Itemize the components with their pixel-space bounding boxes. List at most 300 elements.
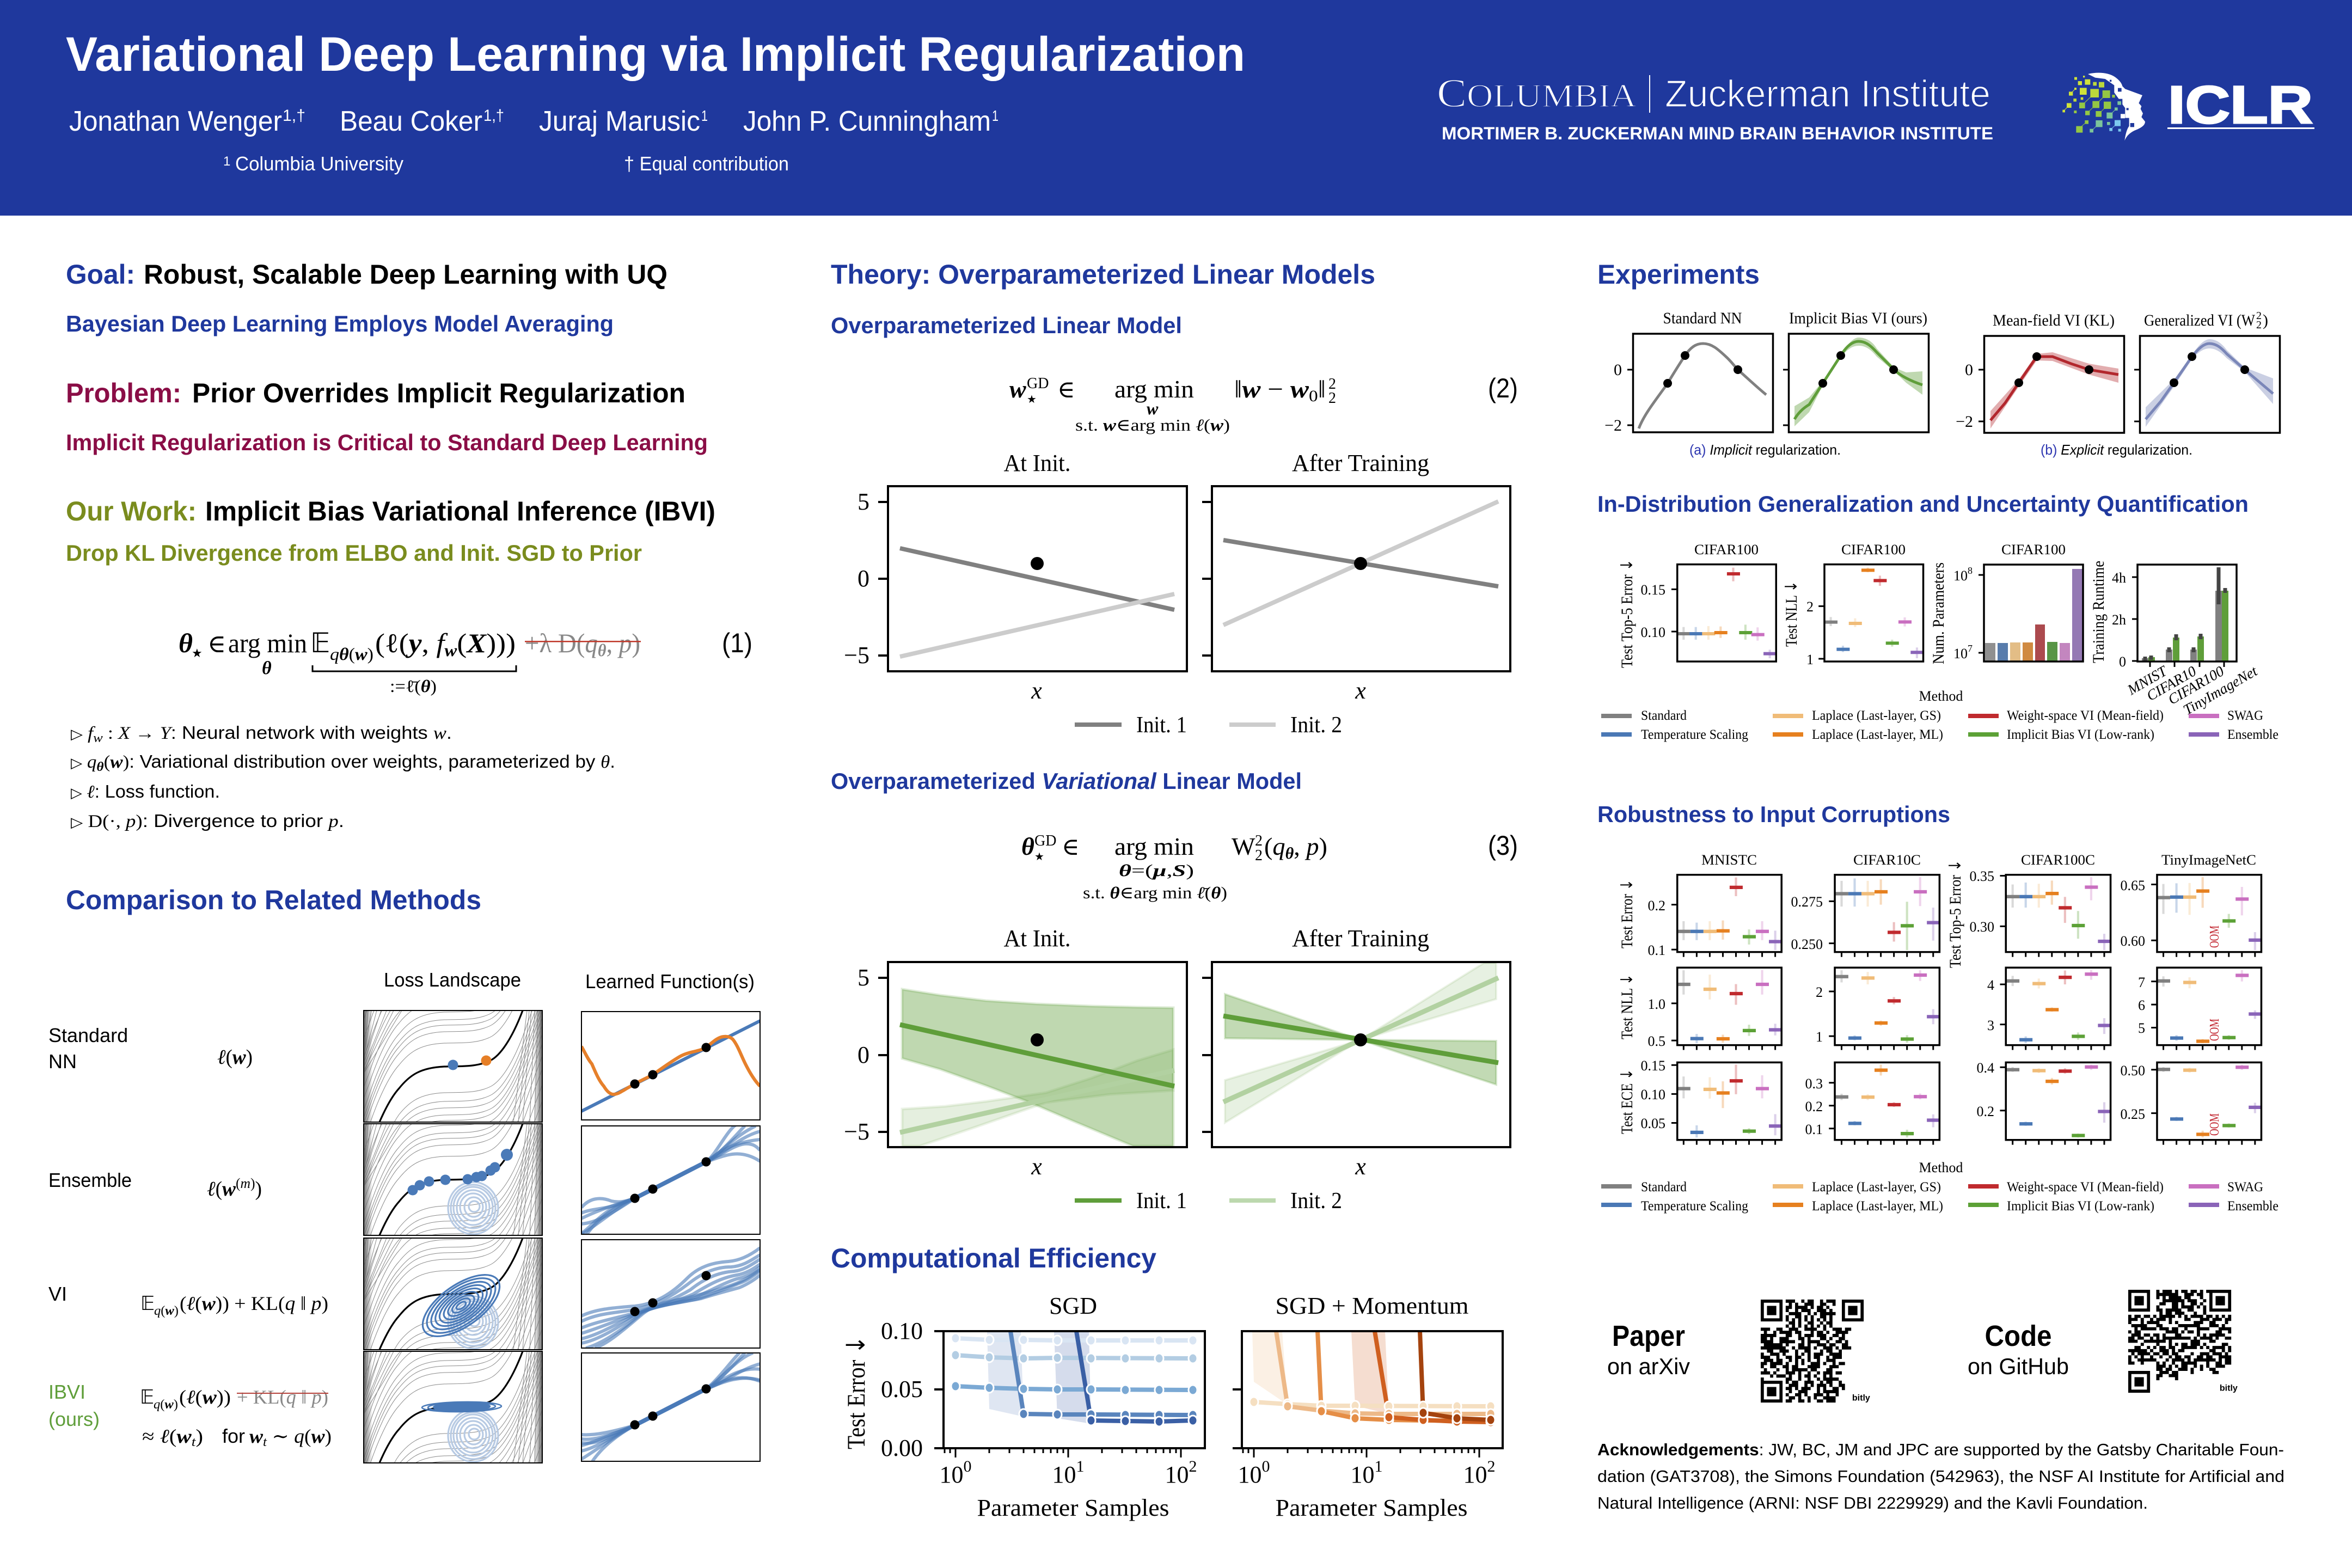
logo: ICLR <box>2062 73 2314 140</box>
chart: mean-field VI: 0 <box>1965 361 1973 379</box>
row label: IBVI: for <box>222 1425 245 1447</box>
loss landscape: VI <box>363 1238 543 1350</box>
equation 3: θ <box>1285 844 1294 862</box>
chart: TinyImageNetC ECE: 0.50 <box>2120 1063 2145 1079</box>
equation 3: p) <box>1306 832 1327 860</box>
panel: our work: Implicit Bias Variational Inference (IBVI) <box>205 496 715 526</box>
chart: TinyImageNetC NLL <box>2138 967 2261 1050</box>
authors: Beau Coker <box>340 106 482 137</box>
chart: linear model, at init <box>844 450 1187 704</box>
code link: on GitHub <box>1968 1353 2069 1379</box>
row label: VI: 𝔼 <box>140 1293 155 1315</box>
chart: CIFAR100 parameters <box>1930 542 2083 664</box>
chart: CIFAR100C ECE <box>1976 1060 2111 1145</box>
chart: CIFAR100 NLL: 1 <box>1806 652 1814 667</box>
paper link: Paper <box>1612 1320 1685 1352</box>
chart: SGD + momentum: 10 <box>1463 1461 1487 1488</box>
legend: in-distribution: Temperature Scaling <box>1641 727 1748 742</box>
chart: CIFAR100 parameters: CIFAR100 <box>2001 542 2066 558</box>
row label: IBVI: q(w) <box>294 1425 331 1447</box>
chart: MNISTC error <box>1647 875 1781 958</box>
panel: problem: Prior Overrides Implicit Regularization <box>192 378 685 408</box>
chart: variational, at init: At Init. <box>1004 925 1070 952</box>
chart: training runtime: CIFAR10 <box>2143 663 2199 704</box>
column headings <box>384 969 755 993</box>
equation 3: (q <box>1264 832 1285 860</box>
chart: variational, at init: 0 <box>857 1042 869 1068</box>
paper link: on arXiv <box>1607 1353 1690 1379</box>
panel: goal: Robust, Scalable Deep Learning with UQ <box>144 259 667 290</box>
chart: SGD: 0.10 <box>881 1318 923 1344</box>
learned function: ensemble <box>581 1123 760 1234</box>
QR code: paper: bitly <box>1852 1393 1870 1403</box>
chart: standard NN: Standard NN <box>1663 309 1742 327</box>
logo: Columbia Zuckerman Institute: COLUMBIA <box>1437 71 1637 116</box>
legend: in-distribution: Laplace (Last-layer, ML) <box>1812 727 1943 742</box>
chart: TinyImageNetC error <box>2120 875 2261 957</box>
column titles: CIFAR10C <box>1853 852 1921 868</box>
chart: CIFAR100C error: 0.35 <box>1970 868 1994 884</box>
chart: variational, at init: −5 <box>844 1118 869 1145</box>
chart: training runtime: TinyImageNet <box>2180 662 2261 718</box>
text block: symbol definitions <box>71 722 615 831</box>
legend: linear model: Init. 1 <box>1136 713 1187 738</box>
chart: TinyImageNetC NLL: 6 <box>2138 997 2145 1013</box>
chart: CIFAR100 parameters: 7 <box>1968 643 1973 654</box>
equation 1: :=ℓ̄(θ) <box>390 676 437 696</box>
chart: training runtime: Training Runtime <box>2090 561 2108 663</box>
chart: MNISTC ECE: 0.05 <box>1641 1116 1665 1131</box>
authors: 1,† <box>283 107 305 125</box>
column headings: Learned Function(s) <box>585 970 755 993</box>
row label: ensemble: (m) <box>236 1175 255 1191</box>
text block: symbol definitions: ( <box>104 752 110 772</box>
chart: generalized VI <box>2134 310 2280 433</box>
authors: John P. Cunningham <box>743 106 991 137</box>
chart: MNISTC NLL: 0.5 <box>1647 1033 1665 1049</box>
chart: CIFAR10C NLL: 2 <box>1816 984 1823 1000</box>
chart: SGD: 0.05 <box>881 1376 923 1402</box>
text block: symbol definitions: ▷ ℓ: Loss function. <box>71 781 220 802</box>
column titles: TinyImageNetC <box>2161 852 2256 868</box>
row label: standard NN: Standard <box>48 1024 128 1046</box>
row label: IBVI: (ℓ(w)) <box>179 1386 231 1408</box>
chart: linear model, at init: At Init. <box>1004 450 1070 476</box>
chart: CIFAR100 NLL <box>1782 542 1924 667</box>
affiliations: Columbia University <box>235 152 403 175</box>
title: Variational Deep Learning via Implicit Regularization <box>66 27 1245 81</box>
chart: SGD: 1 <box>1076 1457 1085 1475</box>
equation 1: ∈ <box>207 630 226 658</box>
row label: IBVI: t <box>192 1435 197 1449</box>
chart: linear model, after training <box>1202 450 1510 704</box>
heading: computational efficiency: Computational Efficiency <box>831 1243 1156 1273</box>
logo: Columbia Zuckerman Institute: MORTIMER B. ZUCKERMAN MIND BRAIN BEHAVIOR INSTITUTE <box>1442 124 1993 143</box>
chart: TinyImageNetC ECE: 0.25 <box>2120 1106 2145 1122</box>
chart: MNISTC ECE <box>1641 1058 1781 1145</box>
chart: mean-field VI: Mean-field VI (KL) <box>1993 311 2115 329</box>
text block: symbol definitions: X → Y: Neural network with weights w. <box>118 722 451 743</box>
legend: in-distribution: Ensemble <box>2227 727 2278 742</box>
chart: variational, after training: After Training <box>1292 925 1429 952</box>
legend: in-distribution: SWAG <box>2227 708 2263 723</box>
chart: MNISTC NLL: 1.0 <box>1647 996 1665 1012</box>
row axis labels: Test Error ↓ <box>1618 879 1637 948</box>
legend: robustness: Weight-space VI (Mean-field) <box>2007 1180 2164 1195</box>
comparison figure <box>48 972 761 1463</box>
row axis labels: Test NLL ↓ <box>1618 974 1637 1039</box>
equation 3: , <box>1294 832 1306 860</box>
authors: Jonathan Wenger <box>69 106 282 137</box>
row label: IBVI <box>48 1381 332 1449</box>
authors: Juraj Marusic <box>539 106 700 137</box>
chart: generalized VI: ) <box>2263 311 2268 329</box>
row label: IBVI: ∼ <box>267 1425 294 1447</box>
panel: problem: Problem: <box>66 378 181 408</box>
equation 3: θ <box>1021 832 1034 860</box>
authors: 1 <box>701 107 708 124</box>
equation 2: w <box>1147 399 1159 418</box>
chart: CIFAR100C error: 0.30 <box>1970 919 1994 935</box>
equation 2: arg min <box>1114 375 1194 403</box>
equation 2: GD <box>1027 375 1049 392</box>
affiliations: 1 <box>223 154 230 169</box>
legend: in-distribution: Weight-space VI (Mean-field) <box>2007 708 2164 723</box>
chart: linear model, at init: −5 <box>844 642 869 669</box>
equation 2: ‖w − w <box>1234 375 1307 403</box>
column titles: CIFAR100C <box>2021 852 2095 868</box>
equation 1: θ <box>262 658 272 678</box>
legend: in-distribution: Implicit Bias VI (Low-rank) <box>2007 727 2154 742</box>
learned function: standard NN <box>581 1012 760 1120</box>
text block: symbol definitions: θ <box>96 760 104 774</box>
chart: CIFAR100 parameters: 8 <box>1968 565 1973 576</box>
chart: CIFAR100 NLL: Test NLL ↓ <box>1782 581 1801 647</box>
legend: robustness: Ensemble <box>2227 1199 2278 1214</box>
learned function: VI <box>581 1240 760 1348</box>
heading: theory: Theory: Overparameterized Linear Models <box>831 259 1375 290</box>
panel: goal: Bayesian Deep Learning Employs Model Averaging <box>66 311 614 336</box>
logo: ICLR: ICLR <box>2168 75 2313 134</box>
chart: training runtime: 4h <box>2112 570 2126 586</box>
chart: SGD + momentum: 0 <box>1262 1457 1270 1475</box>
chart: CIFAR100C error <box>1970 868 2111 957</box>
equation 1: , <box>606 628 619 658</box>
column titles <box>1701 852 2256 868</box>
affiliations: † Equal contribution <box>624 152 789 175</box>
header band <box>0 0 2352 216</box>
chart: TinyImageNetC ECE: OOM <box>2208 1113 2222 1136</box>
equation 1: +λ D(q <box>525 628 598 658</box>
text block: symbol definitions: ▷ f <box>71 724 93 743</box>
row label: VI <box>48 1283 328 1318</box>
chart: CIFAR100 parameters: 10 <box>1953 646 1968 661</box>
chart: MNISTC error: 0.1 <box>1647 942 1665 958</box>
text block: symbol definitions: w <box>93 731 103 745</box>
chart: TinyImageNetC NLL: 5 <box>2138 1020 2145 1036</box>
chart: CIFAR10C error: 0.250 <box>1791 936 1823 952</box>
captions: (b) Explicit regularization. <box>2041 442 2192 458</box>
chart: SGD: Test Error ↓ <box>841 1336 871 1449</box>
QR code: code <box>2128 1290 2238 1393</box>
chart: SGD: 2 <box>1189 1457 1197 1475</box>
chart: generalized VI: 2 <box>2256 310 2262 322</box>
chart: generalized VI: Generalized VI (W <box>2144 311 2256 329</box>
chart: SGD + momentum: SGD + Momentum <box>1275 1293 1469 1319</box>
chart: mean-field VI: −2 <box>1956 413 1973 431</box>
equation 2: ★ <box>1027 393 1037 406</box>
chart: CIFAR100C NLL: 3 <box>1987 1018 1994 1033</box>
legend: in-distribution <box>1601 688 2278 742</box>
chart: CIFAR100 top-5 error <box>1618 542 1776 668</box>
equation 2: ‖ <box>1318 375 1326 403</box>
row axis labels: Test Top-5 Error ↓ <box>1946 860 1965 968</box>
equation 2: 0 <box>1309 387 1318 405</box>
chart: TinyImageNetC NLL: OOM <box>2208 1019 2222 1041</box>
chart: training runtime: MNIST <box>2124 662 2171 699</box>
chart: SGD + momentum: 1 <box>1374 1457 1383 1475</box>
equation 3: W <box>1232 832 1255 860</box>
panel: goal: Goal: <box>66 259 135 290</box>
chart: SGD: 0.00 <box>881 1435 923 1461</box>
text block: symbol definitions: : <box>103 724 118 743</box>
chart: CIFAR100 top-5 error: Test Top-5 Error ↓ <box>1618 559 1637 668</box>
code link: Code <box>1985 1320 2051 1352</box>
chart: SGD + momentum: 10 <box>1238 1461 1262 1488</box>
equation 2: w <box>1009 375 1026 403</box>
chart: CIFAR10C ECE: 0.2 <box>1805 1099 1823 1114</box>
panel: our work: Drop KL Divergence from ELBO and Init. SGD to Prior <box>66 540 642 566</box>
legend: variational <box>1075 1189 1342 1214</box>
chart: MNISTC ECE: 0.15 <box>1641 1058 1665 1074</box>
heading: in-distribution: In-Distribution Generalization and Uncertainty Quantification <box>1597 491 2249 517</box>
equation 2: 2 <box>1328 390 1336 407</box>
equation 1: 𝔼 <box>310 627 330 659</box>
chart: CIFAR100 top-5 error: CIFAR100 <box>1694 542 1759 558</box>
chart: variational, at init <box>844 925 1187 1180</box>
equation 2: 2 <box>1328 376 1336 393</box>
chart: CIFAR100C NLL <box>1987 967 2111 1050</box>
logo: Columbia Zuckerman Institute <box>1437 71 1993 143</box>
chart: CIFAR100 top-5 error: 0.10 <box>1641 624 1665 640</box>
chart: TinyImageNetC NLL: 7 <box>2138 975 2145 990</box>
acknowledgements: Natural Intelligence (ARNI: NSF DBI 2229929) and the Kavli Foundation. <box>1597 1493 2148 1512</box>
equation 3: 2 <box>1255 847 1263 864</box>
chart: TinyImageNetC error: 0.65 <box>2120 878 2145 893</box>
text block: symbol definitions: ▷ q <box>71 752 96 772</box>
chart: CIFAR100 NLL: 2 <box>1806 599 1814 615</box>
row label: ensemble <box>48 1169 262 1200</box>
legend: robustness: Temperature Scaling <box>1641 1199 1748 1214</box>
legend: robustness: Method <box>1919 1160 1963 1175</box>
loss landscape: standard NN <box>363 1010 543 1123</box>
row label: IBVI: ) <box>195 1425 203 1447</box>
logo: Columbia Zuckerman Institute: Zuckerman Institute <box>1665 72 1990 115</box>
chart: SGD + momentum: 2 <box>1487 1457 1495 1475</box>
captions <box>1689 442 2192 458</box>
row label: standard NN: ℓ(w) <box>217 1046 253 1069</box>
chart: training runtime <box>2090 561 2261 718</box>
chart: training runtime: CIFAR100 <box>2165 663 2227 708</box>
chart: mean-field VI <box>1956 311 2124 433</box>
row label: IBVI: 𝔼 <box>140 1386 154 1408</box>
chart: CIFAR10C ECE: 0.1 <box>1805 1122 1823 1137</box>
row label: ensemble: ) <box>255 1178 262 1200</box>
equation 1 <box>179 627 752 696</box>
chart: CIFAR100C ECE: 0.4 <box>1976 1060 1994 1076</box>
chart: TinyImageNetC ECE <box>2120 1062 2261 1145</box>
legend: in-distribution: Laplace (Last-layer, GS) <box>1812 708 1941 723</box>
chart: linear model, at init: 5 <box>857 488 869 515</box>
equation 2: ∈ <box>1057 376 1075 403</box>
chart: linear model, at init: 0 <box>857 565 869 592</box>
chart: linear model, after training: After Training <box>1292 450 1429 476</box>
equation 3: (3) <box>1488 830 1518 861</box>
chart: TinyImageNetC error: 0.60 <box>2120 933 2145 949</box>
chart: implicit bias VI <box>1783 309 1928 432</box>
row label: standard NN: NN <box>48 1050 77 1073</box>
chart: generalized VI: 2 <box>2256 319 2262 331</box>
acknowledgements <box>1597 1440 2284 1512</box>
chart: SGD: 0 <box>964 1457 971 1475</box>
row label: IBVI: w <box>249 1425 264 1447</box>
row label: IBVI: + KL(q ‖ p) <box>237 1386 328 1408</box>
chart: SGD + momentum: 10 <box>1350 1461 1374 1488</box>
panel: goal <box>66 259 667 336</box>
row label: VI: (ℓ(w)) + KL(q ‖ p) <box>180 1293 328 1314</box>
legend: in-distribution: Standard <box>1641 708 1687 723</box>
chart: CIFAR100 parameters: 10 <box>1953 568 1968 584</box>
equation 3: ∈ <box>1062 834 1080 860</box>
acknowledgements: Acknowledgements: JW, BC, JM and JPC are supported by the Gatsby Charitable Foun- <box>1597 1440 2284 1459</box>
equation 1: p) <box>619 628 641 658</box>
chart: CIFAR10C error <box>1791 875 1939 957</box>
equation 3: s.t. θ∈arg min ℓ̄(θ) <box>1083 883 1227 902</box>
legend: robustness: Laplace (Last-layer, GS) <box>1812 1180 1941 1195</box>
equation 1: (ℓ(y, f <box>375 628 444 658</box>
chart: standard NN: −2 <box>1604 416 1622 434</box>
heading: robustness: Robustness to Input Corruptions <box>1597 801 1950 827</box>
chart: standard NN: 0 <box>1614 361 1622 379</box>
chart: CIFAR10C error: 0.275 <box>1791 894 1823 910</box>
chart: SGD: Parameter Samples <box>977 1494 1169 1521</box>
equation 1: ★ <box>192 647 203 660</box>
row label: IBVI: t <box>263 1435 267 1449</box>
legend: robustness: Implicit Bias VI (Low-rank) <box>2007 1199 2154 1214</box>
chart: CIFAR100C NLL: 4 <box>1987 977 1994 993</box>
affiliations <box>223 152 789 175</box>
panel: our work: Our Work: <box>66 496 197 526</box>
legend: robustness: SWAG <box>2227 1180 2263 1195</box>
authors: 1,† <box>483 107 504 125</box>
equation 3: GD <box>1034 832 1056 849</box>
loss landscape: IBVI <box>363 1351 543 1463</box>
row label: IBVI: q(w) <box>154 1398 178 1412</box>
column titles: MNISTC <box>1701 852 1757 868</box>
chart: implicit bias VI: Implicit Bias VI (ours) <box>1789 309 1927 327</box>
equation 1: θ <box>179 628 193 658</box>
acknowledgements: dation (GAT3708), the Simons Foundation (542963), the NSF AI Institute for Artificial and <box>1597 1467 2284 1486</box>
equation 1: X))) <box>467 628 513 658</box>
chart: CIFAR10C ECE <box>1805 1062 1939 1145</box>
row label: IBVI: (ours) <box>48 1408 100 1430</box>
equation 1: ( <box>457 628 467 658</box>
chart: training runtime: 0 <box>2119 654 2126 670</box>
legend: in-distribution: Method <box>1919 688 1963 704</box>
chart: CIFAR10C ECE: 0.3 <box>1805 1076 1823 1092</box>
chart: training runtime: 2h <box>2112 612 2126 628</box>
chart: linear model, at init: x <box>1031 677 1042 704</box>
equation 1: w <box>444 640 457 660</box>
equation 3: arg min <box>1114 832 1194 860</box>
heading: comparison: Comparison to Related Methods <box>66 885 481 915</box>
learned function: IBVI <box>581 1353 760 1461</box>
panel: problem <box>66 378 708 455</box>
equation 2: s.t. w∈arg min ℓ(w) <box>1075 415 1230 434</box>
legend: robustness <box>1601 1160 2278 1214</box>
panel: problem: Implicit Regularization is Critical to Standard Deep Learning <box>66 430 708 455</box>
chart: CIFAR10C NLL: 1 <box>1816 1029 1823 1045</box>
equation 1: θ <box>598 640 607 660</box>
legend: linear model <box>1075 713 1342 738</box>
chart: CIFAR100 top-5 error: 0.15 <box>1641 582 1665 598</box>
legend: variational: Init. 1 <box>1136 1189 1187 1214</box>
row label: IBVI: IBVI <box>48 1381 85 1403</box>
QR code: code: bitly <box>2220 1383 2238 1393</box>
row axis labels <box>1618 860 1965 1134</box>
legend: linear model: Init. 2 <box>1290 713 1342 738</box>
chart: SGD: 10 <box>1165 1461 1189 1488</box>
text block: symbol definitions: ▷ D(·, p): Divergence to prior p. <box>71 811 344 831</box>
equation 1: arg min <box>228 628 307 658</box>
captions: (a) Implicit regularization. <box>1689 442 1841 458</box>
chart: variational, at init: 5 <box>857 964 869 991</box>
subheading: linear model: Overparameterized Linear Model <box>831 313 1182 338</box>
panel: our work <box>66 496 715 566</box>
chart: TinyImageNetC error: OOM <box>2208 926 2222 948</box>
chart: linear model, after training: x <box>1355 677 1366 704</box>
equation 3: 2 <box>1255 832 1263 849</box>
row label: standard NN <box>48 1024 253 1073</box>
equation 2 <box>1009 373 1518 434</box>
chart: SGD + momentum: Parameter Samples <box>1275 1494 1468 1521</box>
chart: SGD <box>841 1293 1205 1521</box>
chart: variational, after training <box>1202 925 1510 1180</box>
QR code: paper <box>1761 1300 1870 1403</box>
row label: ensemble: Ensemble <box>48 1169 132 1191</box>
row label: ensemble: ℓ(w <box>207 1178 236 1200</box>
row label: VI: VI <box>48 1283 67 1305</box>
chart: variational, after training: x <box>1355 1153 1366 1180</box>
chart: CIFAR100 parameters: Num. Parameters <box>1930 562 1947 664</box>
legend: robustness: Laplace (Last-layer, ML) <box>1812 1199 1943 1214</box>
row label: VI: q(w) <box>154 1304 179 1318</box>
chart: CIFAR100C ECE: 0.2 <box>1976 1104 1994 1119</box>
chart: SGD: SGD <box>1049 1293 1097 1319</box>
legend: variational: Init. 2 <box>1290 1189 1342 1214</box>
subheading: variational linear model: Overparameterized Variational Linear Model <box>831 768 1302 794</box>
equation 3: θ=( μ,S) <box>1119 861 1194 880</box>
equation 3 <box>1021 830 1518 902</box>
equation 1: qθ(w) <box>330 644 373 664</box>
chart: CIFAR100 NLL: CIFAR100 <box>1841 542 1906 558</box>
authors: 1 <box>992 107 999 124</box>
legend: robustness: Standard <box>1641 1180 1687 1195</box>
chart: MNISTC NLL <box>1647 967 1781 1050</box>
chart: SGD: 10 <box>940 1461 964 1488</box>
chart: MNISTC error: 0.2 <box>1647 898 1665 914</box>
chart: standard NN <box>1604 309 1773 434</box>
